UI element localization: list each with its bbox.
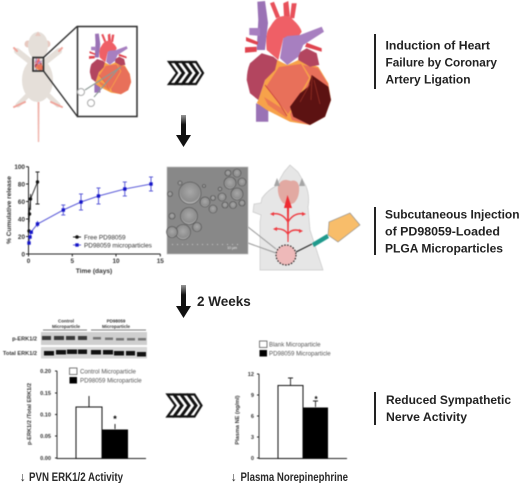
micrograph: PLGA microparticles xyxy=(166,167,248,254)
bar chart: plasma NE: 12 xyxy=(248,372,254,378)
legend: PD98059 Microparticle xyxy=(269,350,331,358)
chart: cumulative release: 15 xyxy=(157,258,164,265)
bar chart: p-ERK: * xyxy=(113,414,117,424)
legend: Blank Microparticle xyxy=(269,342,321,348)
label bar: injection xyxy=(374,207,376,255)
chart legend: PD98059 microparticles xyxy=(84,242,152,249)
chevrons: top xyxy=(169,62,203,84)
heading: reduced sympathetic nerve activity: Reduced Sympathetic xyxy=(386,393,511,407)
bar chart: plasma NE xyxy=(235,341,347,462)
illustration: mouse with surgery site xyxy=(14,32,62,142)
chart: cumulative release: 100 xyxy=(14,164,25,171)
zoom callout box xyxy=(33,26,137,116)
label: 2 weeks: 2 Weeks xyxy=(197,294,251,309)
bar chart: p-ERK: 0.20 xyxy=(40,369,51,375)
western blot: p-ERK1/2 xyxy=(12,336,37,342)
label bar: sympathetic xyxy=(374,392,376,425)
chart: cumulative release xyxy=(6,164,164,275)
chart: cumulative release: 20 xyxy=(18,234,25,241)
bar chart: p-ERK: 0.05 xyxy=(40,434,51,440)
legend: PD98059 Microparticle xyxy=(80,378,142,384)
icon: large infarcted heart xyxy=(245,1,331,125)
heading: reduced sympathetic nerve activity: Nerve Activity xyxy=(386,410,467,424)
heading: induction of heart failure: Artery Ligation xyxy=(386,72,470,86)
heading: subcutaneous injection: PLGA Microparticles xyxy=(385,242,503,256)
heading: induction of heart failure: Induction of Heart xyxy=(386,38,490,52)
bar chart: plasma NE: 0 xyxy=(251,456,254,462)
chevrons: bottom xyxy=(168,394,202,416)
western blot: Total ERK1/2 xyxy=(3,351,37,357)
bar chart: plasma NE: 9 xyxy=(251,393,254,399)
illustration: mouse with injection xyxy=(248,165,360,270)
bar chart: p-ERK: 0.15 xyxy=(40,391,51,397)
legend xyxy=(260,341,331,358)
icon: heart with ligation forceps xyxy=(78,33,131,106)
western blot: Microparticle xyxy=(52,324,80,329)
label bar: heart failure induction xyxy=(374,34,376,89)
syringe xyxy=(296,213,360,252)
chart: cumulative release: 5 xyxy=(71,258,75,265)
western blot xyxy=(3,318,147,358)
micrograph: PLGA microparticles: 10 μm xyxy=(227,246,237,250)
chart: cumulative release: 10 xyxy=(112,258,120,265)
western blot: Control xyxy=(58,318,74,324)
bar chart: plasma NE: 3 xyxy=(251,435,254,441)
bar chart: plasma NE: 6 xyxy=(251,414,254,420)
chart: cumulative release: 60 xyxy=(18,199,25,206)
bar chart: p-ERK: 0.10 xyxy=(40,412,51,418)
bar chart: p-ERK: p-ERK1/2 /Total ERK1/2 xyxy=(27,383,33,445)
bar chart: plasma NE: Plasma NE (ng/ml) xyxy=(235,395,241,445)
arrow: down 2 xyxy=(176,285,191,318)
legend: Control Microparticle xyxy=(80,368,136,376)
arrow: down 1 xyxy=(176,115,191,147)
bar chart: plasma NE: * xyxy=(314,395,318,404)
heading: induction of heart failure xyxy=(386,38,497,86)
heading: subcutaneous injection xyxy=(385,208,520,256)
bar chart: p-ERK xyxy=(27,368,146,462)
chart: cumulative release: 0 xyxy=(27,258,31,265)
chart: cumulative release: 0 xyxy=(21,252,25,258)
chart: cumulative release: 80 xyxy=(18,182,25,188)
chart legend: Free PD98059 xyxy=(84,234,126,241)
chart: cumulative release: % Cumulative release xyxy=(6,176,13,244)
injection site xyxy=(276,245,296,265)
chart legend xyxy=(73,234,152,249)
heading: induction of heart failure: Failure by Coronary xyxy=(386,56,497,70)
icon: small heart in mouse xyxy=(34,58,43,70)
chart: cumulative release: 40 xyxy=(18,216,25,224)
western blot: PD98059 xyxy=(107,318,126,324)
heading: subcutaneous injection: of PD98059-Loaded xyxy=(385,224,500,238)
legend xyxy=(70,368,142,384)
western blot: Microparticle xyxy=(102,324,130,329)
bar chart: p-ERK: 0.00 xyxy=(40,456,51,462)
chart: cumulative release: Time (days) xyxy=(76,268,112,275)
heading: reduced sympathetic nerve activity xyxy=(386,393,511,424)
